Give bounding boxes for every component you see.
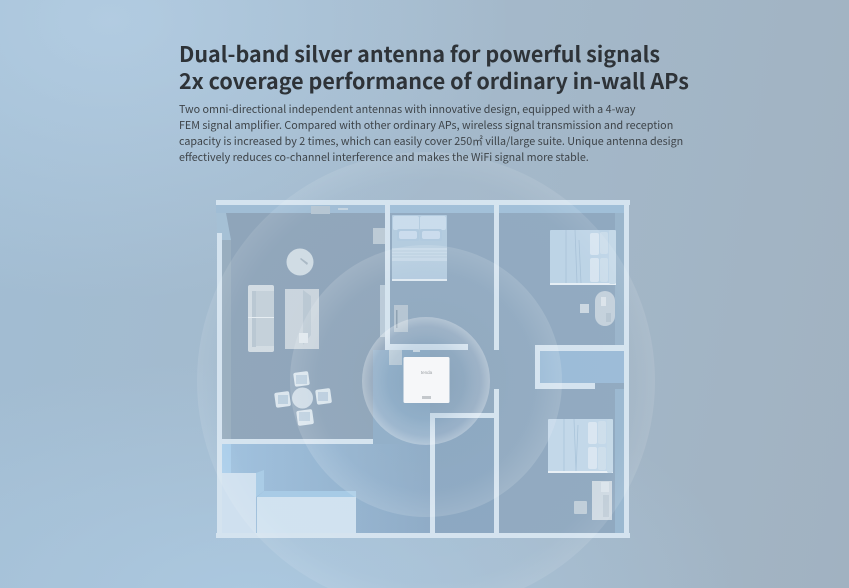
living room furniture xyxy=(248,206,385,352)
built-in cabinets xyxy=(222,470,356,533)
bed: right lower room xyxy=(548,419,613,520)
bed: middle room xyxy=(373,215,447,365)
description text: capacity is increased by 2 times, which can easily cover 250㎡ villa/large suite. Unique antenna design xyxy=(179,134,683,149)
description text: FEM signal amplifier. Compared with other ordinary APs, wireless signal transmission and reception xyxy=(179,118,673,133)
description text: Two omni-directional independent antennas with innovative design, equipped with a 4-way xyxy=(179,102,635,116)
router: tenda xyxy=(421,370,433,375)
description text xyxy=(179,102,683,165)
signal coverage rings xyxy=(197,152,655,588)
title xyxy=(179,38,689,96)
floors xyxy=(216,205,624,533)
walls xyxy=(216,200,630,538)
bed: right upper room xyxy=(550,230,616,326)
router xyxy=(404,357,450,403)
dining set xyxy=(274,371,332,426)
title: Dual-band silver antenna for powerful signals xyxy=(179,38,660,69)
title: 2x coverage performance of ordinary in-wall APs xyxy=(179,65,689,96)
description text: effectively reduces co-channel interference and makes the WiFi signal more stable. xyxy=(179,150,589,165)
